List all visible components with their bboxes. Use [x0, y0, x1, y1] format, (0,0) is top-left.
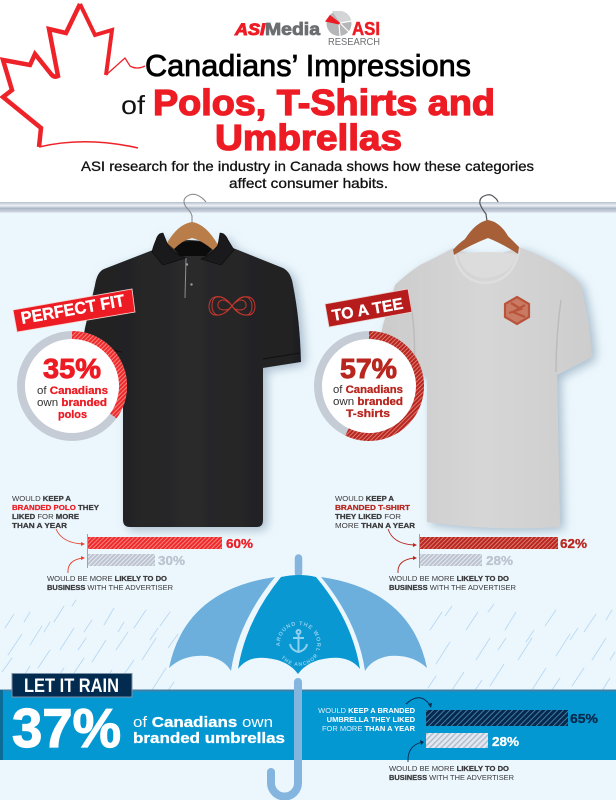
title: Umbrellas	[215, 117, 402, 158]
title: Canadians’ Impressions	[145, 48, 471, 83]
polo hanger wire	[184, 194, 206, 224]
badge: to a tee: TO A TEE	[331, 296, 405, 325]
business label: WOULD BE MORE LIKELY TO DO	[389, 574, 509, 583]
keep label: WOULD KEEP A BRANDED	[318, 706, 416, 715]
bar keep 60%	[88, 537, 222, 549]
circle stat: 57% t-shirts: T-shirts	[346, 408, 390, 420]
keep label: FOR MORE THAN A YEAR	[322, 724, 416, 733]
umbrella top spike	[295, 558, 302, 573]
t-shirt hanger wire	[480, 195, 498, 221]
umbrella right panel	[321, 577, 427, 671]
value 60%: 60%	[226, 537, 253, 551]
polo body	[79, 233, 301, 527]
logo: ASI Media: Media	[265, 19, 320, 39]
business label: BUSINESS WITH THE ADVERTISER	[389, 773, 515, 782]
keep label: MORE THAN A YEAR	[335, 521, 416, 530]
axis	[86, 534, 88, 568]
title: of	[121, 90, 146, 120]
umbrella	[169, 554, 427, 800]
umbrella logo: around the world: THE ANCHOR	[282, 654, 318, 666]
logo: ASI Media: ASI	[234, 20, 266, 39]
keep label	[335, 494, 416, 530]
t-shirt sleeve folds	[410, 300, 561, 372]
ring value 57%	[347, 335, 420, 437]
polo neck opening	[172, 241, 214, 256]
circle stat: 57% t-shirts: of Canadians	[333, 384, 403, 396]
circle stat: 35% polos	[21, 335, 123, 437]
t-shirt neck rib	[454, 249, 519, 283]
bar chart: t-shirts	[335, 494, 587, 592]
keep label: THAN A YEAR	[12, 521, 68, 530]
polo sleeve cuff	[85, 345, 300, 359]
clothes rail	[0, 202, 616, 212]
t-shirt	[375, 195, 592, 528]
arrow to keep bar	[56, 529, 85, 546]
rain	[2, 600, 615, 695]
umbrella center panel	[238, 575, 360, 674]
circle stat: 57% t-shirts	[318, 335, 420, 437]
bar chart: umbrellas	[318, 698, 598, 782]
business label	[389, 574, 517, 592]
business label: BUSINESS WITH THE ADVERTISER	[47, 583, 174, 592]
ring background	[21, 335, 123, 437]
business label	[389, 764, 515, 782]
stat text: canadians own branded umbrellas: of Canadians own	[133, 714, 273, 731]
icon: maple leaf outline	[3, 4, 145, 148]
big stat: 37%: 37%	[12, 697, 121, 759]
business label	[47, 574, 174, 592]
t-shirt inner neck	[458, 252, 516, 278]
value 28%: 28%	[486, 554, 513, 568]
circle stat: 35% polos: of Canadians	[37, 385, 108, 397]
logo: ASI Research: ASI	[352, 19, 380, 39]
ring value 35%	[72, 335, 123, 416]
band: umbrella statistic	[0, 690, 616, 760]
logo: ASI Media	[234, 19, 320, 39]
umbrella handle	[271, 682, 298, 796]
bar keep 62%	[420, 537, 558, 549]
bar business 30%	[88, 554, 155, 566]
polo collar	[152, 233, 234, 265]
stat text: canadians own branded umbrellas: branded umbrellas	[133, 730, 285, 747]
badge: perfect fit: PERFECT FIT	[19, 291, 127, 328]
stat text: canadians own branded umbrellas	[133, 714, 285, 747]
bar business 28%	[420, 554, 482, 566]
keep label: WOULD KEEP A	[12, 494, 72, 503]
title	[121, 48, 495, 158]
icon: anchor	[290, 630, 307, 652]
subtitle: affect consumer habits.	[229, 175, 388, 191]
value 62%: 62%	[560, 537, 587, 551]
value 28%: 28%	[492, 734, 519, 749]
circle stat: 35% polos: own branded	[37, 397, 107, 409]
keep label: LIKED FOR MORE	[12, 512, 79, 521]
polo shirt	[79, 194, 301, 527]
bar business 28%	[426, 733, 488, 748]
axis	[418, 534, 420, 568]
polo placket	[185, 258, 186, 298]
t-shirt wood hanger	[453, 220, 519, 255]
circle stat: 35% polos: polos	[58, 409, 87, 421]
bar keep 65%	[426, 710, 568, 726]
bar chart: polos	[12, 494, 253, 592]
t-shirt logo: hexagon	[505, 297, 529, 324]
business label: WOULD BE MORE LIKELY TO DO	[47, 574, 167, 583]
polo logo: infinity	[209, 297, 255, 315]
badge: to a tee	[325, 289, 412, 327]
arrow to business bar	[68, 556, 85, 573]
keep label: BRANDED POLO THEY	[12, 503, 99, 512]
polo buttons	[187, 264, 192, 284]
subtitle: ASI research for the industry in Canada shows how these categories	[81, 158, 534, 174]
circle stat: 57% t-shirts: own branded	[333, 396, 403, 408]
keep label	[318, 706, 416, 733]
umbrella logo: around the world: AROUND THE WORLD	[276, 621, 321, 651]
keep label: WOULD KEEP A	[335, 494, 395, 503]
t-shirt body	[375, 247, 592, 528]
keep label: BRANDED T-SHIRT	[335, 503, 410, 512]
ring background	[318, 335, 420, 437]
umbrella logo: around the world	[276, 621, 321, 666]
business label: WOULD BE MORE LIKELY TO DO	[389, 764, 509, 773]
logo: ASI Research	[325, 11, 380, 48]
business label: BUSINESS WITH THE ADVERTISER	[389, 583, 517, 592]
badge: let it rain: LET IT RAIN	[24, 676, 119, 697]
value 30%: 30%	[158, 554, 185, 568]
keep label: THEY LIKED FOR	[335, 512, 402, 521]
stat text: 35%	[43, 353, 101, 384]
title: Polos, T-Shirts and	[153, 82, 495, 123]
keep label: UMBRELLA THEY LIKED	[327, 715, 416, 724]
stat text: 57%	[340, 353, 397, 384]
subtitle	[81, 158, 534, 191]
value 65%: 65%	[570, 711, 598, 726]
arrow to keep bar	[388, 529, 417, 547]
logo: ASI Research: RESEARCH	[328, 36, 380, 48]
arrow to keep bar	[406, 698, 432, 708]
arrow to business bar	[398, 556, 417, 573]
keep label	[12, 494, 99, 530]
umbrella left panel	[169, 577, 275, 671]
polo wood hanger	[167, 222, 218, 250]
arrow to business bar	[408, 740, 424, 762]
